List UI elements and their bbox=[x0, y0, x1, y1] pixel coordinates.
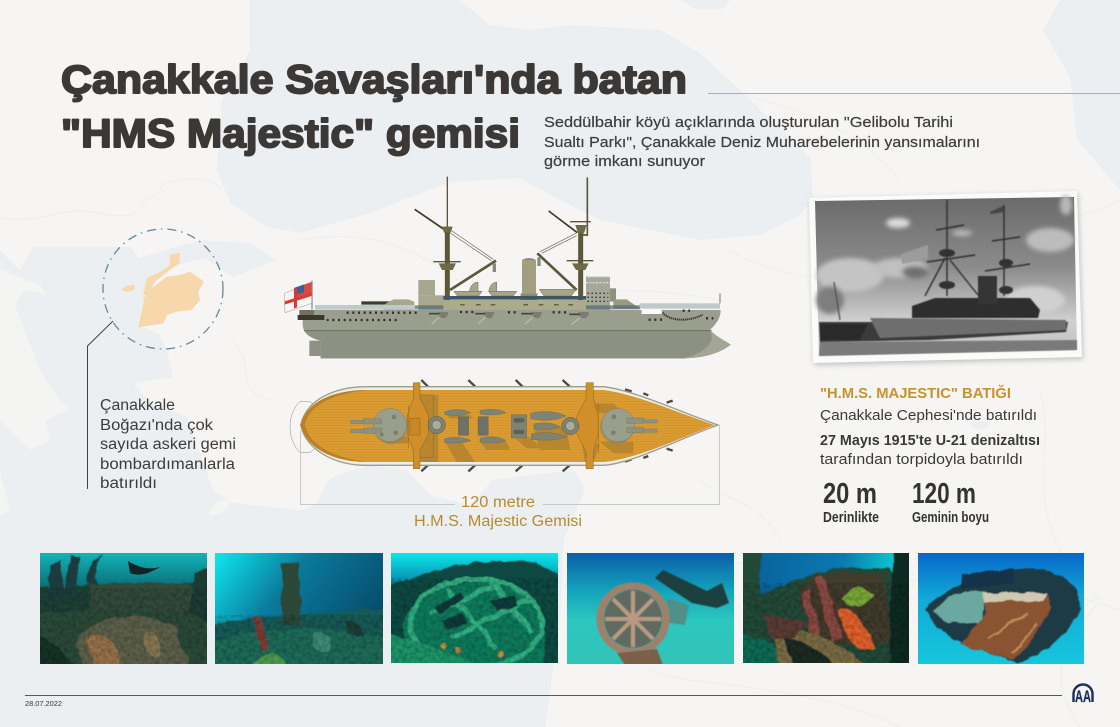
photo 2: column on seabed bbox=[215, 553, 383, 664]
date: 28.07.2022 bbox=[25, 699, 62, 708]
stat: depth bbox=[823, 478, 879, 526]
hull and deck bbox=[301, 387, 718, 465]
left caption: batırıldı bbox=[100, 475, 157, 492]
superstructure bbox=[361, 277, 640, 310]
wreck info text: 27 Mayıs 1915'te U-21 denizaltısı bbox=[820, 433, 1040, 449]
photo 3: wheel wreck bbox=[391, 553, 558, 663]
photo 6: sunken boat bbox=[918, 553, 1084, 664]
title: Çanakkale Savaşları'nda batan bbox=[61, 58, 687, 102]
top view of ship bbox=[290, 380, 718, 471]
left caption: Boğazı'nda çok bbox=[100, 417, 213, 434]
dimension label bbox=[414, 494, 582, 530]
dimension label: 120 metre bbox=[461, 494, 535, 511]
photo 1: wreck deck with diver bbox=[40, 553, 207, 664]
side view of ship bbox=[284, 177, 731, 358]
stat: depth: Derinlikte bbox=[823, 510, 879, 526]
logo: AA bbox=[1075, 687, 1091, 706]
subtitle: Sualtı Parkı", Çanakkale Deniz Muharebelerinin yansımalarını bbox=[544, 135, 980, 151]
left caption: bombardımanlarla bbox=[100, 456, 235, 473]
stat: depth: 20 m bbox=[823, 478, 877, 510]
ship boats bbox=[454, 282, 576, 296]
wreck info text bbox=[820, 408, 1040, 468]
photo 5: rusted hull plates bbox=[743, 553, 909, 663]
footer line bbox=[25, 694, 1062, 696]
stat: length: Geminin boyu bbox=[912, 510, 989, 526]
left caption: sayıda askeri gemi bbox=[100, 436, 236, 453]
leader line bbox=[88, 321, 113, 489]
side guns bbox=[327, 380, 673, 471]
left caption bbox=[100, 397, 236, 492]
stat: length bbox=[912, 478, 989, 526]
subtitle: görme imkanı sunuyor bbox=[544, 154, 705, 170]
photo 4: wheel on sand bbox=[567, 553, 734, 664]
gun turrets bbox=[351, 408, 657, 444]
wreck info text: tarafından torpidoyla batırıldı bbox=[820, 452, 1023, 468]
stern outline bbox=[290, 402, 319, 452]
masts and rigging bbox=[415, 177, 593, 300]
bridge wings bbox=[407, 383, 598, 469]
deck boats and fittings bbox=[445, 409, 567, 443]
stat: length: 120 m bbox=[912, 478, 976, 510]
left caption: Çanakkale bbox=[100, 397, 175, 414]
archive photo bbox=[809, 191, 1083, 365]
flag bbox=[284, 281, 312, 313]
subtitle bbox=[544, 115, 980, 170]
wreck info text: Çanakkale Cephesi'nde batırıldı bbox=[820, 408, 1037, 424]
wreck info heading: "H.M.S. MAJESTIC" BATIĞI bbox=[820, 384, 1011, 402]
title rule bbox=[708, 92, 1120, 94]
title: "HMS Majestic" gemisi bbox=[61, 112, 520, 156]
locator map circle bbox=[103, 229, 223, 349]
dimension label: H.M.S. Majestic Gemisi bbox=[414, 513, 582, 530]
subtitle: Seddülbahir köyü açıklarında oluşturulan "Gelibolu Tarihi bbox=[544, 115, 953, 131]
hull bbox=[298, 309, 731, 358]
deck shadows bbox=[377, 395, 633, 462]
funnel bbox=[521, 258, 537, 300]
barbettes bbox=[428, 416, 579, 435]
deck rails bbox=[315, 293, 720, 310]
dimension lines bbox=[300, 425, 720, 504]
logo bbox=[1074, 685, 1092, 706]
title bbox=[61, 58, 687, 156]
